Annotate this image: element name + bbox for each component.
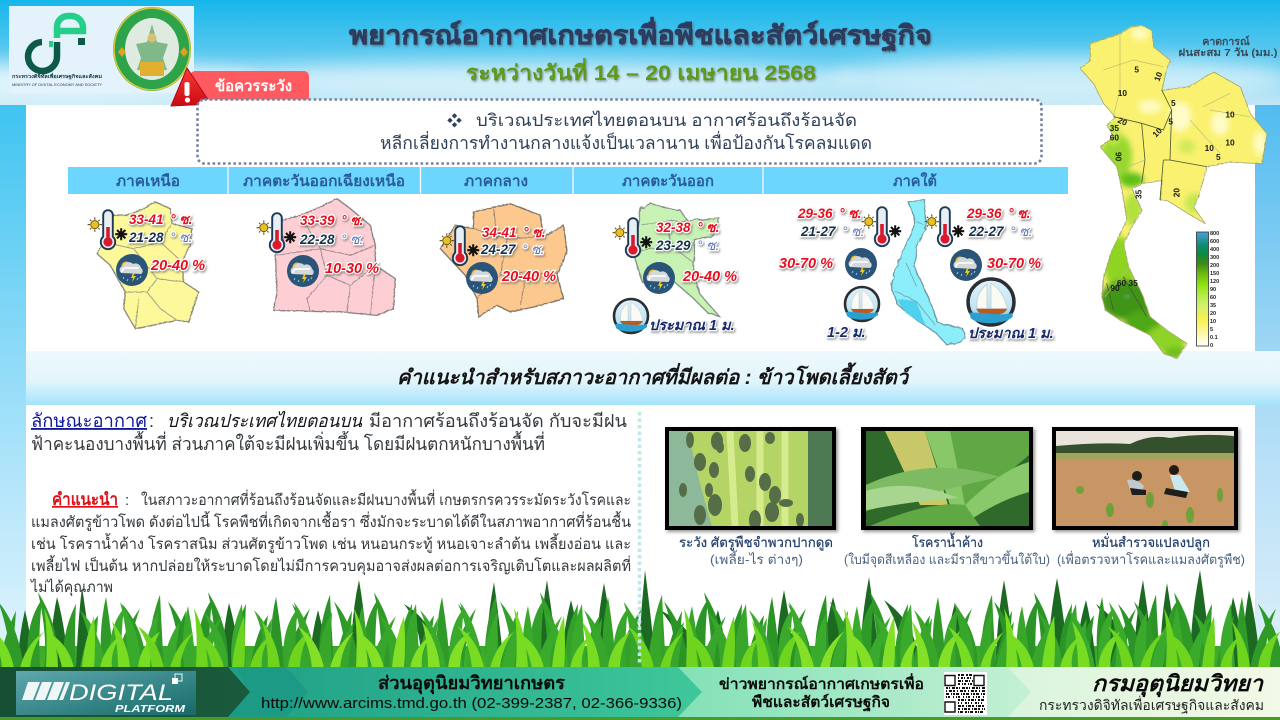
- rainfall forecast map of Thailand: 20: [1171, 188, 1181, 197]
- caption: survey the field: [1057, 533, 1245, 568]
- digital platform logo: [16, 671, 196, 715]
- text block: recommendation: :: [125, 492, 129, 509]
- text block: recommendation: แมลงศัตรูข้าวโพด ดังต่อไปนี้ โรคพืชที่เกิดจากเชื้อรา ซึ่งมักจะระบาดได้ดีในสภาพอากาศที่ร้อนชื้น: [31, 511, 631, 531]
- text block: recommendation: เช่น โรคราน้ำค้าง โรคราสนิม ส่วนศัตรูข้าวโพด เช่น หนอนกระทู้ หนอเจาะลำต้น เพลี้ยงอ่อน และ: [31, 533, 631, 553]
- caption: survey the field: (เพื่อตรวจหาโรคและแมลงศัตรูพืช): [1057, 551, 1245, 568]
- digital platform logo: DIGITAL: [69, 680, 173, 705]
- warning message box: บริเวณประเทศไทยตอนบน อากาศร้อนถึงร้อนจัด: [476, 110, 857, 130]
- panel: east region: 32-38 ° ซ.: [656, 220, 719, 235]
- text block: weather characteristics: มีอากาศร้อนถึงร้อนจัด กับจะมีฝน: [369, 411, 627, 431]
- regional header row: ภาคตะวันออกเฉียงเหนือ: [243, 173, 405, 190]
- digital platform logo: PLATFORM: [115, 703, 185, 715]
- panel: east region: ประมาณ 1 ม.: [649, 318, 735, 334]
- rainfall forecast map of Thailand: 10: [1225, 137, 1235, 147]
- icon: meteorological department seal: [113, 7, 191, 91]
- rainfall forecast map of Thailand: 5: [1171, 98, 1176, 108]
- rainfall forecast map of Thailand: 60 35: [1117, 278, 1138, 288]
- division name and contact: http://www.arcims.tmd.go.th (02-399-2387, 02-366-9336): [261, 695, 682, 712]
- text block: recommendation: เพลี้ยไฟ เป็นต้น หากปล่อยให้ระบาดโดยไม่มีการควบคุมอาจส่งผลต่อการเจริญเติบโตและผลผลิตที่: [31, 555, 631, 576]
- footer banner: [0, 667, 1280, 717]
- panel: north region: 33-41 ° ซ.: [129, 212, 192, 227]
- warning message box: หลีกเลี่ยงการทำงานกลางแจ้งเป็นเวลานาน เพื่อป้องกันโรคลมแดด: [380, 131, 872, 153]
- panel: east region: 20-40 %: [682, 269, 737, 285]
- warning message box: [198, 100, 1042, 164]
- panel: north region: 20-40 %: [150, 258, 205, 274]
- rainfall forecast map of Thailand: 5: [1216, 152, 1221, 162]
- north region map: [97, 202, 198, 328]
- rainfall colour legend: 200: [1210, 263, 1219, 269]
- rainfall colour legend: 800: [1210, 231, 1219, 237]
- rainfall forecast map of Thailand: [1070, 10, 1280, 360]
- rainfall colour legend: 35: [1210, 303, 1216, 309]
- rainfall colour legend: 10: [1210, 319, 1216, 325]
- photo: downy mildew leaves: [861, 427, 1033, 530]
- panel: northeast region: 10-30 %: [325, 261, 379, 277]
- regional header row: ภาคตะวันออก: [622, 173, 714, 190]
- warning message box: ❖: [447, 113, 462, 130]
- panel: south region: 1-2 ม.: [827, 325, 866, 341]
- photo: farmers surveying the field: [1052, 427, 1238, 530]
- rainfall colour legend: 60: [1210, 295, 1216, 301]
- rainfall colour legend: 5: [1210, 327, 1213, 333]
- rainfall map caption: คาดการณ์: [1202, 35, 1250, 48]
- panel: south region: 30-70 %: [987, 256, 1041, 272]
- panel: north region: 21-28 ° ซ.: [128, 230, 192, 245]
- regional header row: ภาคใต้: [893, 172, 937, 190]
- rainfall colour legend: 0.1: [1210, 335, 1218, 341]
- rainfall forecast map of Thailand: 20: [1116, 115, 1129, 128]
- east region map: [633, 203, 718, 315]
- department name: [1039, 671, 1265, 714]
- south region map: [890, 198, 965, 345]
- left blue side strip: [0, 105, 26, 665]
- rainfall colour legend: 20: [1210, 311, 1216, 317]
- rainfall forecast map of Thailand: 10: [1118, 88, 1127, 98]
- panel: south region: ประมาณ 1 ม.: [968, 326, 1054, 342]
- caption: downy mildew: (ใบมีจุดสีเหลือง และมีราสีขาวขึ้นใต้ใบ): [844, 550, 1050, 568]
- bulletin name: พืชและสัตว์เศรษฐกิจ: [752, 693, 890, 712]
- panel: south region: 29-36 ° ซ.: [797, 206, 861, 221]
- rainfall colour legend: 90: [1210, 287, 1216, 293]
- rainfall map caption: [1178, 35, 1278, 59]
- text block: recommendation: ไม่ได้คุณภาพ: [30, 578, 113, 597]
- text block: weather characteristics: ฟ้าคะนองบางพื้นที่ ส่วนภาคใต้จะมีฝนเพิ่มขึ้น โดยมีฝนตกหนักบางพื้นที่: [31, 431, 545, 454]
- panel: east region: 23-29 ° ซ.: [655, 238, 719, 253]
- alert tag: ข้อควรระวัง: [215, 78, 292, 95]
- photo: aphids on corn stem: [665, 427, 836, 530]
- rainfall colour legend: 0: [1210, 343, 1213, 349]
- caption: survey the field: หมั่นสำรวจแปลงปลูก: [1092, 533, 1210, 551]
- text block: weather characteristics: ลักษณะอากาศ: [31, 410, 147, 431]
- panel: south region: 22-27 ° ซ.: [968, 224, 1032, 239]
- text block: recommendation: [30, 489, 631, 597]
- rainfall colour legend: 150: [1210, 271, 1219, 277]
- icon: digital economy ministry logo: กระทรวงดิจิทัลเพื่อเศรษฐกิจและสังคม: [12, 72, 102, 80]
- division name and contact: [261, 673, 682, 712]
- rainfall forecast map of Thailand: 10: [1205, 143, 1214, 153]
- caption: downy mildew: โรคราน้ำค้าง: [912, 532, 983, 550]
- rainfall forecast map of Thailand: 10: [1150, 125, 1164, 139]
- text block: recommendation: คำแนะนำ: [52, 490, 118, 509]
- rainfall forecast map of Thailand: 5: [1134, 65, 1139, 75]
- icon: digital economy ministry logo: [12, 16, 102, 87]
- panel: south region: 29-36 ° ซ.: [966, 206, 1030, 221]
- caption: sucking insect pests: (เพลี้ย-ไร ต่างๆ): [710, 550, 803, 567]
- rainfall forecast map of Thailand: 90: [1114, 152, 1124, 162]
- text block: weather characteristics: [31, 410, 627, 454]
- rainfall colour legend: 600: [1210, 239, 1219, 245]
- text block: weather characteristics: :: [149, 411, 154, 431]
- department name: กระทรวงดิจิทัลเพื่อเศรษฐกิจและสังคม: [1039, 696, 1264, 714]
- caption: downy mildew: [844, 532, 1050, 568]
- rainfall forecast map of Thailand: 35: [1110, 123, 1119, 133]
- rainfall colour legend: 300: [1210, 255, 1219, 261]
- department name: กรมอุตุนิยมวิทยา: [1092, 671, 1265, 698]
- bulletin name: ข่าวพยากรณ์อากาศเกษตรเพื่อ: [719, 673, 924, 693]
- title: พยากรณ์อากาศเกษตรเพื่อพืชและสัตว์เศรษฐกิจ: [349, 16, 932, 53]
- panel: central region: [440, 203, 567, 317]
- regional header row: ภาคกลาง: [464, 173, 528, 190]
- rainfall colour legend: 120: [1210, 279, 1219, 285]
- text block: recommendation: ในสภาวะอากาศที่ร้อนถึงร้อนจัดและมีฝนบางพื้นที่ เกษตรกรควรระมัดระวังโรคและ: [141, 489, 631, 509]
- rainfall forecast map of Thailand: 5: [1168, 116, 1173, 126]
- bulletin name: [719, 673, 924, 712]
- panel: central region: 34-41 ° ซ.: [482, 225, 545, 240]
- icon: digital economy ministry logo: MINISTRY OF DIGITAL ECONOMY AND SOCIETY: [12, 82, 102, 87]
- caption: sucking insect pests: ระวัง ศัตรูพืชจำพวกปากดูด: [679, 535, 833, 551]
- rainfall colour legend: [1196, 231, 1219, 349]
- caption: sucking insect pests: [679, 535, 833, 567]
- regional header row: [68, 167, 1068, 194]
- rainfall forecast map of Thailand: 10: [1225, 110, 1235, 120]
- logo panel: [9, 6, 194, 93]
- rainfall forecast map of Thailand: 35: [1134, 189, 1144, 199]
- panel: northeast region: [257, 198, 395, 315]
- panel: north region: [88, 202, 205, 328]
- northeast region map: [273, 198, 395, 315]
- panel: south region: [779, 198, 1054, 345]
- division name and contact: ส่วนอุตุนิยมวิทยาเกษตร: [378, 673, 565, 695]
- rainfall map caption: ฝนสะสม 7 วัน (มม.): [1178, 47, 1278, 59]
- text block: weather characteristics: บริเวณประเทศไทยตอนบน: [167, 410, 363, 431]
- subtitle date range: ระหว่างวันที่ 14 – 20 เมษายน 2568: [466, 57, 816, 85]
- rainfall forecast map of Thailand: 90: [1110, 283, 1120, 293]
- white content panel: [26, 105, 1255, 665]
- panel: central region: 20-40 %: [501, 269, 556, 285]
- callout label background: [190, 71, 309, 102]
- panel: northeast region: 33-39 ° ซ.: [300, 213, 363, 228]
- rainfall colour legend: 400: [1210, 247, 1219, 253]
- rainfall forecast map of Thailand: 60: [1110, 133, 1119, 143]
- rainfall forecast map of Thailand: 10: [1152, 70, 1164, 83]
- panel: east region: [613, 203, 737, 334]
- grass field: [0, 570, 1280, 720]
- panel: south region: 30-70 %: [779, 256, 833, 272]
- sky background with clouds: [0, 0, 1280, 110]
- panel: northeast region: 22-28 ° ซ.: [299, 232, 363, 247]
- panel: south region: 21-27 ° ซ.: [800, 224, 864, 239]
- icon: warning triangle: [171, 68, 211, 106]
- right blue side strip: [1255, 105, 1280, 665]
- alert tag: [171, 68, 309, 106]
- icon: QR code: [944, 672, 987, 715]
- panel: central region: 24-27 ° ซ.: [480, 242, 544, 257]
- advice heading: คำแนะนำสำหรับสภาวะอากาศที่มีผลต่อ : ข้าวโพดเลี้ยงสัตว์: [397, 362, 913, 389]
- central region map: [440, 203, 567, 317]
- band behind advice heading: [26, 351, 1280, 405]
- regional header row: ภาคเหนือ: [116, 173, 180, 190]
